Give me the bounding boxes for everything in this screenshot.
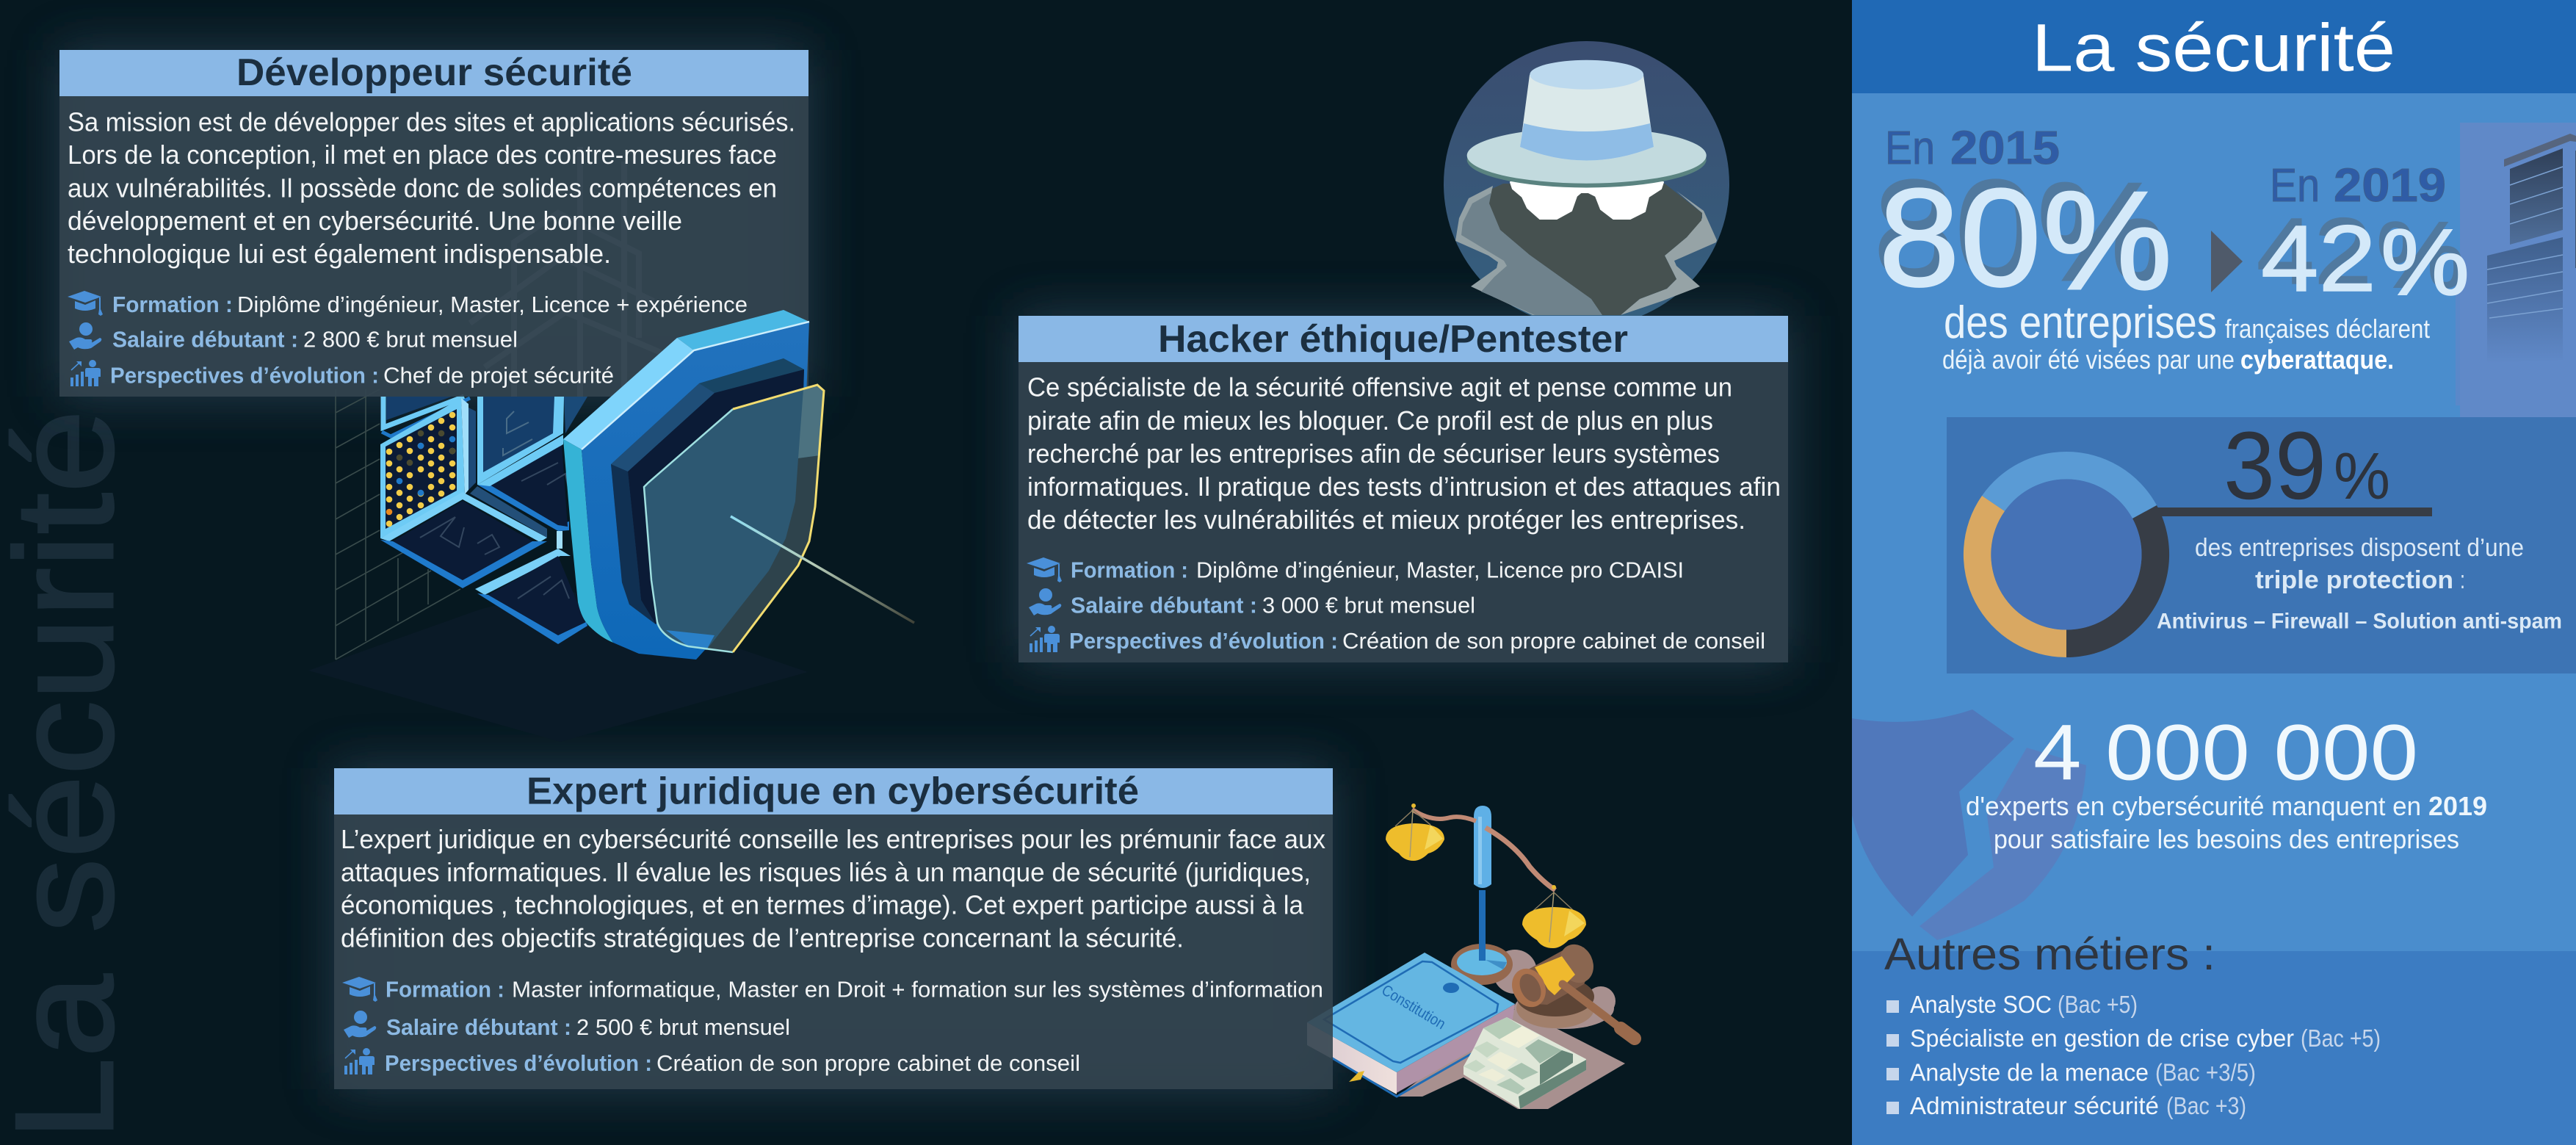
formation line: Formation : [112,292,233,317]
stat: 80%: 80 [1873,151,2036,307]
career line: Création de son propre cabinet de conseil [1342,628,1765,654]
panel: Développeur sécurité [59,50,808,397]
illustration: circuit cubes behind the shield [308,147,808,742]
heading: Expert juridique en cybersécurité: Expert juridique en cybersécurité [527,770,1139,812]
stat: 39%: 39 [2224,411,2326,519]
stat: 80%: % [2043,163,2172,319]
money stacks [1464,1017,1586,1109]
stat: 80%: 80 [1878,160,2041,316]
salary line: 2 500 € brut mensuel [576,1014,790,1040]
text block: experts caption: pour satisfaire les besoins des entreprises [1994,824,2459,854]
salary line: Salaire débutant : [1071,592,1257,618]
salary line [386,1014,790,1040]
text block: experts caption: 2019 [2428,791,2487,821]
stat: 80%: % [2037,154,2166,310]
list: other jobs: Administrateur sécurité [1910,1092,2159,1119]
donut chart [1964,452,2169,657]
text block: mission: développement et en cybersécurité. Une bonne veille [68,206,682,236]
text block: role: économiques , technologiques, et en termes d’image). Cet expert participe aussi à la [341,890,1304,920]
icon: hand with coin [69,322,101,350]
text block: protection caption: triple protection [2255,566,2453,594]
icon: graduation cap [68,291,103,316]
glass shield [644,385,824,652]
list: other jobs: (Bac +3) [2166,1092,2246,1119]
text block: mission [68,107,795,269]
illustration: hacker [1444,41,1729,327]
salary line [112,327,518,353]
text block: role [1027,372,1781,535]
law book [1307,953,1515,1097]
list: other jobs: Analyste SOC [1910,991,2052,1018]
formation line: Diplôme d’ingénieur, Master, Licence + expérience [237,292,748,317]
career line [110,363,614,389]
stat: 42% [2257,199,2470,315]
gavel [1506,939,1635,1039]
icon: hand with coin [344,1011,376,1038]
salary line [1071,592,1475,618]
stat: 39%: % [2334,440,2390,513]
formation line: Master informatique, Master en Droit + formation sur les systèmes d’information [512,977,1323,1003]
text block: mission: Lors de la conception, il met en place des contre-mesures face [68,140,777,170]
formation line: Diplôme d’ingénieur, Master, Licence pro CDAISI [1196,557,1684,583]
career line [385,1050,1080,1076]
icon: career growth [1030,626,1060,652]
text block: role: recherché par les entreprises afin de sécuriser leurs systèmes [1027,438,1720,469]
list: other jobs: (Bac +5) [2058,991,2138,1018]
illustration: broken ghost shield [1852,709,2086,940]
scale pans [1386,810,1586,948]
text block: experts caption [1966,791,2487,854]
salary line: Salaire débutant : [386,1014,571,1040]
scale stand [1411,803,1556,985]
salary line: 3 000 € brut mensuel [1262,592,1475,618]
text block: role: définition des objectifs stratégiques de l’entreprise concernant la sécurité. [341,922,1184,953]
text block: protection caption: : [2460,566,2465,594]
stat: 42%: 42 [2261,206,2376,311]
dark background [0,0,1852,1145]
list: other jobs: (Bac +3/5) [2155,1059,2256,1086]
stat: En 2019 [2270,159,2446,212]
text block: mission: Sa mission est de développer des sites et applications sécurisés. [68,107,795,137]
stat: En 2019: 2019 [2334,159,2446,212]
stat: En 2019: En [2270,159,2320,212]
text block: experts caption: d'experts en cybersécurité manquent en [1966,791,2421,821]
illustration: scales, law book, gavel and money [1307,803,1635,1109]
text block: protection caption [2157,534,2562,634]
stat: 42%: % [2381,210,2470,315]
salary line: 2 800 € brut mensuel [303,327,518,353]
list: other jobs [1886,991,2381,1119]
text block: attack statistic caption [1942,297,2430,375]
illustration: shield [563,310,914,660]
heading: Autres métiers: Autres métiers : [1884,929,2215,979]
stat: 42%: % [2376,203,2465,308]
career line: Chef de projet sécurité [383,363,614,389]
stat: 39% [2224,411,2390,519]
text block: role: attaques informatiques. Il évalue les risques liés à un manque de sécurité (juridiques, [341,857,1311,887]
text block: protection caption: des entreprises disposent d’une [2195,534,2524,562]
stat: En 2015: 2015 [1950,121,2060,174]
panel: Hacker éthique/Pentester [1019,316,1788,662]
heading: Développeur sécurité: Développeur sécurité [236,51,632,94]
stat: En 2015: En [1885,121,1935,174]
text block: protection caption: Antivirus – Firewall – Solution anti-spam [2157,610,2562,634]
text block: attack statistic caption: des entreprises [1944,297,2217,348]
stat: En 2015 [1885,121,2060,174]
sunglasses [1510,182,1663,219]
list: other jobs: Analyste de la menace [1910,1059,2149,1086]
icon: graduation cap [342,977,377,1002]
text block: role: Ce spécialiste de la sécurité offensive agit et pense comme un [1027,372,1732,402]
list: other jobs: Spécialiste en gestion de crise cyber [1910,1025,2294,1052]
icon: career growth [344,1048,375,1074]
heading: La sécurité: La sécurité [2032,10,2395,85]
text block: role: L’expert juridique en cybersécurité conseille les entreprises pour les prémunir face aux [341,824,1325,854]
career line: Perspectives d’évolution : [1069,628,1338,654]
career line: Perspectives d’évolution : [385,1050,652,1076]
text block: mission: aux vulnérabilités. Il possède donc de solides compétences en [68,173,777,203]
text block: role: de détecter les vulnérabilités et mieux protéger les entreprises. [1027,505,1745,535]
text block: mission: technologique lui est également indispensable. [68,239,611,269]
formation line: Formation : [1071,557,1188,583]
text block: role [341,824,1325,953]
hat [1467,132,1707,188]
career line: Création de son propre cabinet de conseil [656,1050,1080,1076]
law book: Constitution [1378,982,1448,1033]
icon: career growth [70,360,101,386]
panel: Expert juridique en cybersécurité [334,768,1333,1089]
panel: triple protection [1947,411,2576,673]
text block: role: pirate afin de mieux les bloquer. Ce profil est de plus en plus [1027,405,1713,436]
stat: 42%: 42 [2257,199,2372,304]
heading: Hacker éthique/Pentester: Hacker éthique/Pentester [1158,318,1628,361]
salary line: Salaire débutant : [112,327,298,353]
illustration: ghost building [2456,123,2576,417]
arrow [2211,231,2243,292]
list: other jobs: (Bac +5) [2301,1025,2381,1052]
text block: role: informatiques. Il pratique des tests d’intrusion et des attaques afin [1027,472,1781,502]
career line [1069,628,1765,654]
text block: attack statistic caption: françaises déclarent [2225,314,2430,344]
formation line: Formation : [386,977,504,1003]
stat: 80% [1873,151,2172,319]
stat: 4 000 000: 4 000 000 [2033,708,2418,797]
text block: attack statistic caption: déjà avoir été visées par une [1942,344,2235,375]
icon: graduation cap [1027,557,1062,582]
text block: attack statistic caption: cyberattaque. [2240,344,2394,375]
icon: hand with coin [1029,588,1061,615]
career line: Perspectives d’évolution : [110,363,379,389]
panel: right statistics column [1852,0,2576,1145]
